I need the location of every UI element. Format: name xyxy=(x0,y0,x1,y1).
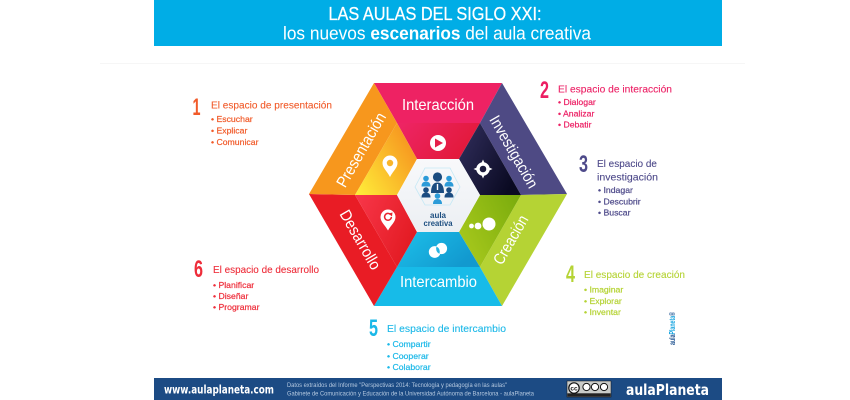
block 3: investigación: • Buscar xyxy=(598,208,631,218)
footer source text xyxy=(287,382,534,398)
block 4: creación: • Inventar xyxy=(584,307,621,317)
header banner xyxy=(154,0,722,46)
center label xyxy=(424,210,453,228)
center hexagon: aula creativa xyxy=(397,159,480,232)
block 1: presentación: • Explicar xyxy=(211,126,247,136)
block 6: desarrollo: 6 xyxy=(194,256,203,283)
block 1: presentación: 1 xyxy=(192,94,200,121)
block 2: interacción: El espacio de interacción xyxy=(558,84,672,96)
block 4: creación: El espacio de creación xyxy=(584,269,685,281)
block 1: presentación xyxy=(192,94,332,147)
block 3: investigación: El espacio de xyxy=(597,158,657,170)
block 6: desarrollo xyxy=(194,256,319,312)
block 3: investigación: • Descubrir xyxy=(598,196,641,206)
creative commons badge: cc xyxy=(570,385,578,392)
block 6: desarrollo: El espacio de desarrollo xyxy=(213,264,319,276)
block 6: desarrollo: • Programar xyxy=(213,302,260,312)
title line 2: los nuevos escenarios del aula creativa xyxy=(283,24,592,44)
block 5: intercambio xyxy=(369,315,506,372)
block 2: interacción: 2 xyxy=(540,77,549,104)
center label: aula xyxy=(430,210,446,220)
block 1: presentación: • Comunicar xyxy=(211,137,259,147)
segment: Desarrollo xyxy=(309,194,417,306)
segment: Intercambio xyxy=(374,232,502,306)
block 4: creación: 4 xyxy=(566,261,575,288)
block 4: creación: • Imaginar xyxy=(584,284,623,294)
block 1: presentación: El espacio de presentación xyxy=(211,100,332,112)
segment: Investigación: Investigación xyxy=(485,113,541,192)
footer source text: Gabinete de Comunicación y Educación de la Universidad Autónoma de Barcelona - aulaPlaneta xyxy=(287,390,534,398)
block 4: creación: • Explorar xyxy=(584,296,622,306)
block 5: intercambio: 5 xyxy=(369,315,378,342)
block 6: desarrollo: • Planificar xyxy=(213,280,254,290)
block 3: investigación: 3 xyxy=(579,151,588,178)
block 6: desarrollo: • Diseñar xyxy=(213,291,248,301)
block 5: intercambio: • Compartir xyxy=(387,339,431,349)
block 3: investigación: investigación xyxy=(597,172,658,184)
title line 1: LAS AULAS DEL SIGLO XXI: xyxy=(328,4,542,24)
vertical brand mark: aulaPlaneta® xyxy=(668,312,677,345)
block 1: presentación: • Escuchar xyxy=(211,114,253,124)
center label: creativa xyxy=(424,218,453,228)
icon: group of people xyxy=(422,172,454,204)
block 5: intercambio: • Colaborar xyxy=(387,362,431,372)
block 2: interacción: • Debatir xyxy=(558,120,592,130)
footer logo: aulaPlaneta xyxy=(626,381,709,399)
footer source text: Datos extraídos del Informe "Perspectivas 2014: Tecnología y pedagogía en las aulas" xyxy=(287,382,508,389)
block 2: interacción xyxy=(540,77,672,130)
block 5: intercambio: • Cooperar xyxy=(387,351,429,361)
segment: Interacción xyxy=(374,83,502,159)
segment: Creación xyxy=(459,194,567,306)
segment: Investigación xyxy=(459,83,567,195)
block 2: interacción: • Analizar xyxy=(558,108,594,118)
block 4: creación xyxy=(566,261,685,317)
block 3: investigación: • Indagar xyxy=(598,185,633,195)
block 2: interacción: • Dialogar xyxy=(558,97,596,107)
block 3: investigación xyxy=(579,151,658,218)
creative commons badge xyxy=(567,381,611,397)
segment: Creación: Creación xyxy=(491,213,532,268)
segment: Desarrollo: Desarrollo xyxy=(336,207,383,273)
hexagon diagram xyxy=(309,83,567,306)
footer bar xyxy=(154,378,722,400)
footer url: www.aulaplaneta.com xyxy=(164,382,274,396)
segment: Presentación: Presentación xyxy=(334,110,390,190)
segment: Intercambio: Intercambio xyxy=(400,274,477,291)
segment: Interacción: Interacción xyxy=(402,97,474,114)
block 5: intercambio: El espacio de intercambio xyxy=(387,323,506,335)
segment: Presentación xyxy=(309,83,417,195)
